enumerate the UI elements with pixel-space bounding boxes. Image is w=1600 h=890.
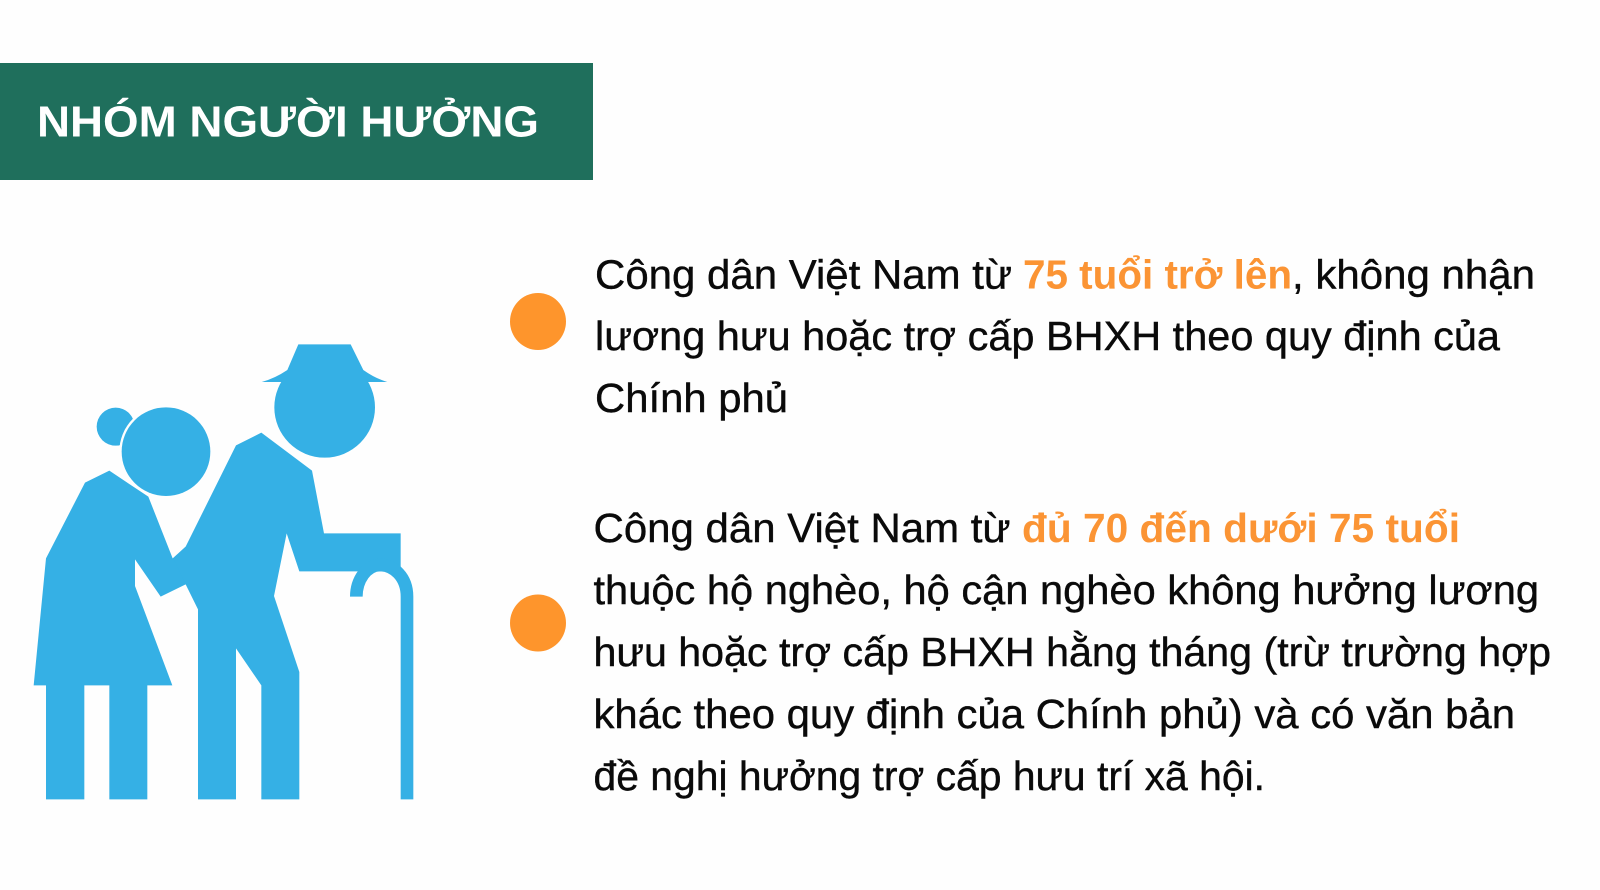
bullet: second criterion: [510, 594, 566, 652]
text block: second criterion: Công dân Việt Nam từ: [594, 505, 1010, 551]
text block: first criterion: 75 tuổi trở lên: [1023, 252, 1292, 298]
text block: second criterion: đề nghị hưởng trợ cấp hưu trí xã hội.: [594, 753, 1265, 799]
icon: elderly couple with cane: [34, 344, 407, 799]
text block: first criterion: Công dân Việt Nam từ: [595, 252, 1012, 298]
text block: second criterion: [594, 505, 1551, 799]
man's hat: [262, 344, 387, 382]
woman's head: [122, 407, 210, 496]
text block: first criterion: [595, 252, 1535, 421]
text block: second criterion: khác theo quy định của Chính phủ) và có văn bản: [594, 691, 1515, 737]
walking cane: [356, 565, 407, 799]
man's body: [173, 433, 401, 799]
bullet: first criterion: [510, 293, 566, 350]
man's head: [274, 357, 375, 458]
title: NHÓM NGƯỜI HƯỞNG: [37, 96, 539, 146]
woman's hair bun: [97, 408, 135, 446]
text block: second criterion: thuộc hộ nghèo, hộ cận nghèo không hưởng lương: [594, 567, 1539, 613]
text block: second criterion: đủ 70 đến dưới 75 tuổi: [1022, 505, 1460, 551]
text block: first criterion: , không nhận: [1292, 252, 1535, 298]
text block: first criterion: Chính phủ: [595, 375, 788, 421]
text block: second criterion: hưu hoặc trợ cấp BHXH hằng tháng (trừ trường hợp: [594, 629, 1551, 675]
text block: first criterion: lương hưu hoặc trợ cấp BHXH theo quy định của: [595, 313, 1500, 359]
woman's body: [34, 471, 200, 799]
header banner: [0, 63, 593, 180]
